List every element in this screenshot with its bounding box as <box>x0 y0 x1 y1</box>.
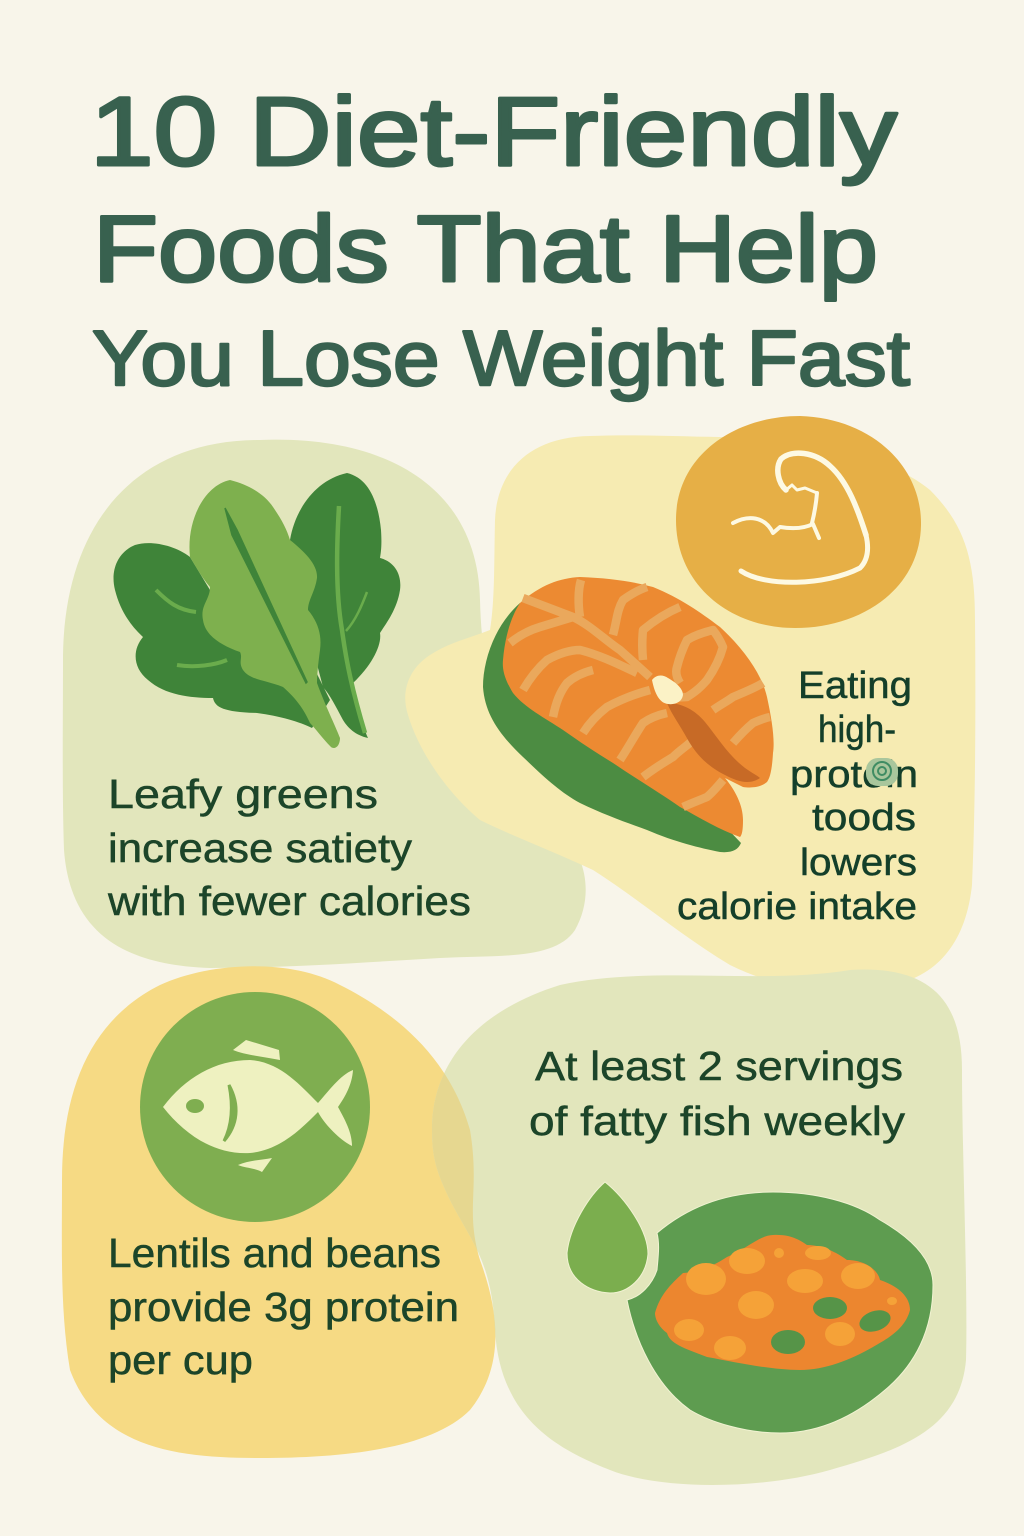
icon: fish badge <box>140 992 370 1222</box>
text: high-protein <box>677 665 918 928</box>
icon: bowl of lentils <box>627 1192 933 1433</box>
text: leafy greens <box>107 771 471 924</box>
text: fatty fish <box>529 1043 906 1144</box>
icon: fish <box>163 1040 353 1172</box>
panel: high-protein foods <box>405 416 975 989</box>
title: Foods That Help <box>93 196 878 301</box>
icon: flexed arm <box>733 453 868 582</box>
text: leafy greens: Leafy greens <box>108 771 378 817</box>
text: high-protein: calorie intake <box>677 886 917 928</box>
panel: fatty fish <box>432 970 966 1485</box>
text: leafy greens: increase satiety <box>108 825 413 871</box>
text: high-protein: high- <box>818 709 896 751</box>
text: high-protein: Eating <box>798 665 912 707</box>
text: lentils: provide 3g protein <box>108 1284 459 1330</box>
title: You Lose Weight Fast <box>92 314 910 402</box>
text: lentils: Lentils and beans <box>108 1230 441 1276</box>
icon: glitch swirl <box>866 758 898 786</box>
text: fatty fish: At least 2 servings <box>535 1043 903 1089</box>
text: high-protein: lowers <box>800 842 917 884</box>
text: fatty fish: of fatty fish weekly <box>529 1098 906 1144</box>
text: high-protein: protein <box>790 754 918 796</box>
text: lentils: per cup <box>108 1337 253 1383</box>
text: leafy greens: with fewer calories <box>107 878 471 924</box>
panel: leafy greens <box>63 440 586 968</box>
text: lentils <box>108 1230 459 1383</box>
icon: salmon steak <box>483 577 774 852</box>
panel: lentils and beans <box>62 966 495 1458</box>
icon: oil drop <box>567 1182 648 1293</box>
text: high-protein: toods <box>812 797 916 839</box>
title <box>90 77 910 402</box>
icon: leafy greens <box>114 473 400 748</box>
icon: flexed arm badge <box>676 416 921 628</box>
title: 10 Diet-Friendly <box>90 77 898 186</box>
